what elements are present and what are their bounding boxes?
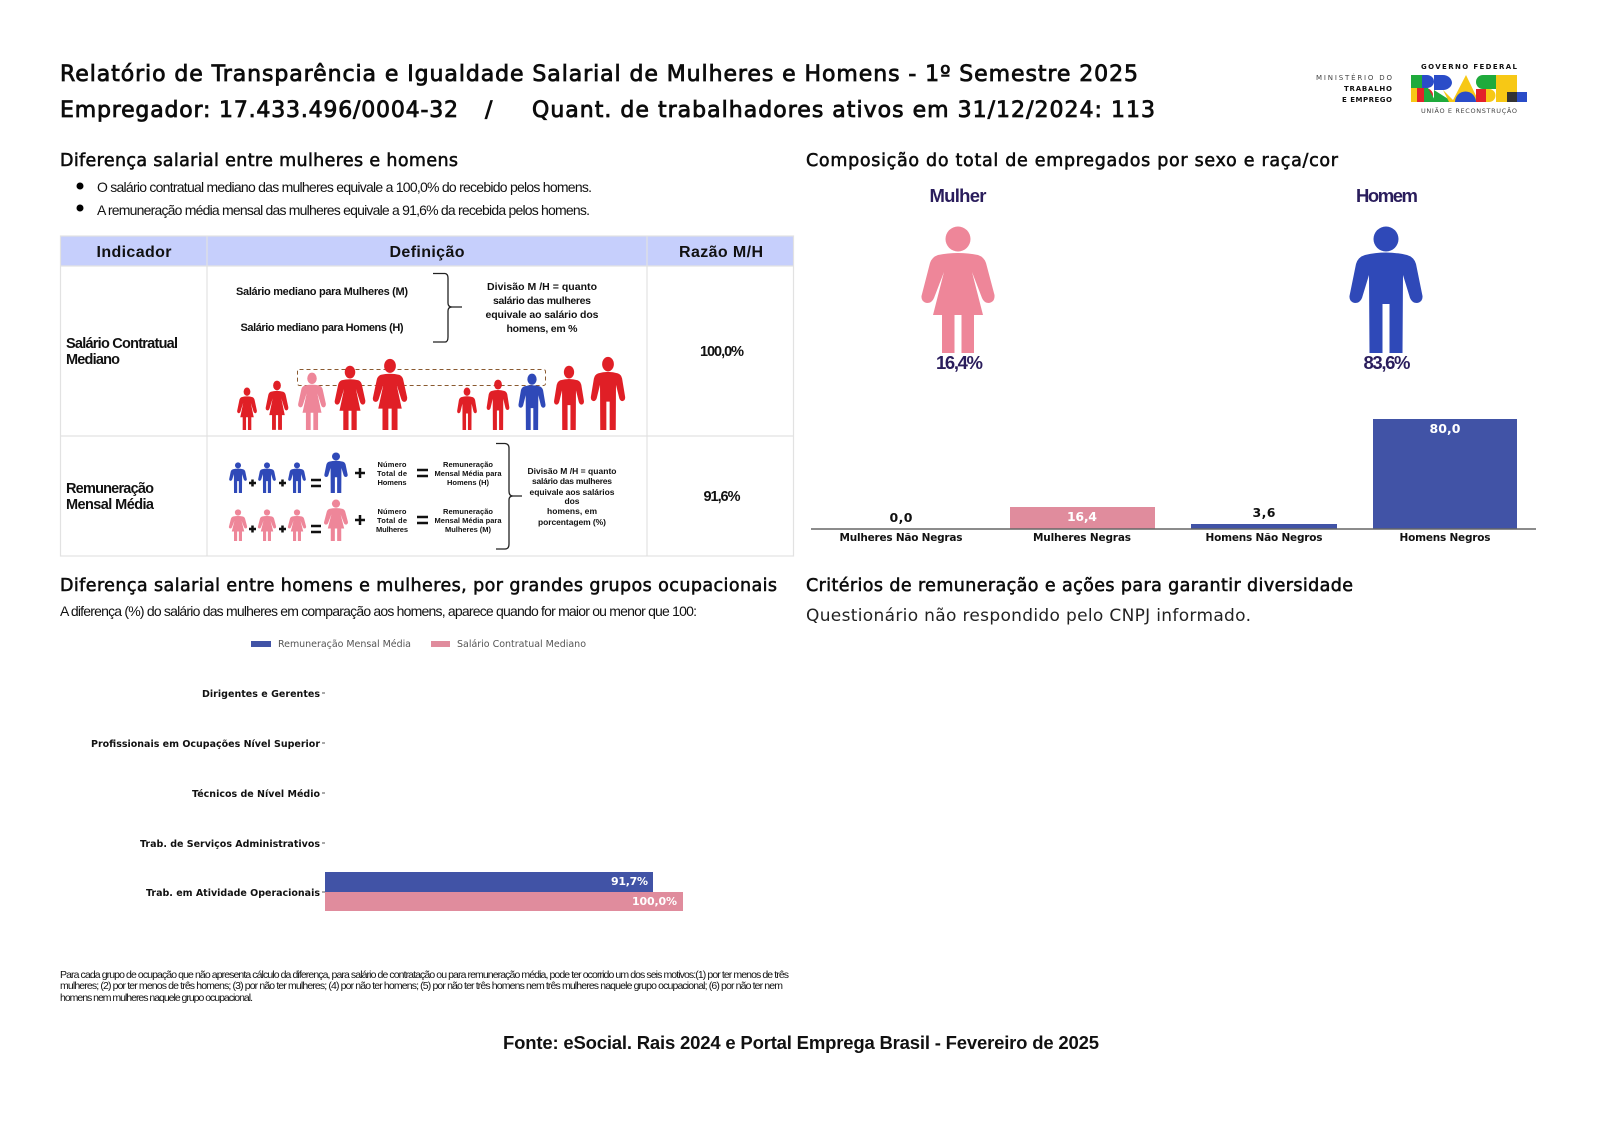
definition: median formula: Salário mediano para Homens (H) [240, 322, 404, 334]
bar chart: sex and race: 0,0 [890, 510, 913, 525]
bar chart: sex and race: 3,6 [1252, 505, 1276, 520]
logo: ministry and government: GOVERNO FEDERAL [1421, 63, 1518, 71]
definition: men average formula: Mensal Média para [434, 469, 502, 478]
definition: average division note: dos [564, 496, 580, 506]
figure: women share: 16,4% [936, 352, 983, 373]
title: / [485, 98, 493, 123]
figure: men share [1349, 185, 1423, 373]
horizontal bar chart: occupational groups: Profissionais em Ocupações Nível Superior [91, 739, 320, 750]
definition: men average formula: Número [378, 460, 407, 469]
logo: ministry and government: E EMPREGO [1342, 96, 1392, 104]
horizontal bar chart: occupational groups: Dirigentes e Gerentes [202, 689, 320, 700]
definition: men average formula: Total de [377, 469, 407, 478]
bar chart: sex and race: Mulheres Não Negras [840, 532, 962, 544]
heading: salary difference: Diferença salarial entre mulheres e homens [60, 151, 458, 171]
title: Empregador: 17.433.496/0004-32 [60, 98, 458, 123]
title: Quant. de trabalhadores ativos em 31/12/2024: 113 [532, 98, 1155, 123]
heading: criteria: Critérios de remuneração e ações para garantir diversidade [806, 576, 1353, 596]
bar chart: sex and race [811, 419, 1536, 544]
logo: ministry and government [1316, 63, 1527, 115]
definition: men average formula: Remuneração [443, 460, 493, 469]
definition: median formula: Salário mediano para Mulheres (M) [236, 286, 408, 298]
figure: men share: Homem [1356, 185, 1418, 206]
bar chart: sex and race: 80,0 [1430, 421, 1461, 436]
title: Relatório de Transparência e Igualdade Salarial de Mulheres e Homens - 1º Semestre 2025 [60, 62, 1138, 87]
text: questionnaire status: Questionário não respondido pelo CNPJ informado. [806, 606, 1251, 626]
definition: men average formula: Homens [378, 478, 406, 487]
chart legend [251, 639, 586, 650]
definition: average division note: salário das mulheres [532, 476, 612, 486]
people row: median illustration [237, 357, 625, 430]
table header [96, 244, 763, 261]
row label: remuneracao: Remuneração [66, 481, 154, 497]
title [60, 62, 1155, 123]
horizontal bar chart: occupational groups: Técnicos de Nível Médio [192, 789, 320, 800]
table header: Indicador [96, 244, 172, 261]
definition: women average formula: Mensal Média para [434, 516, 502, 525]
definition: median formula: equivale ao salário dos [486, 309, 599, 321]
footnote: homens nem mulheres naquele grupo ocupacional. [60, 992, 253, 1004]
logo: ministry and government: MINISTÉRIO DO [1316, 73, 1392, 82]
definition: women average formula: Remuneração [443, 507, 493, 516]
row label: salario contratual: Salário Contratual [66, 336, 178, 352]
definition: average division note [496, 444, 616, 549]
horizontal bar chart: occupational groups: Trab. em Atividade Operacionais [146, 888, 320, 899]
definition: women average formula: Mulheres (M) [445, 525, 492, 534]
bullet list [76, 179, 592, 218]
bullet list: A remuneração média mensal das mulheres equivale a 91,6% da recebida pelos homens. [97, 202, 590, 218]
definition: average division note: equivale aos salários [530, 487, 615, 497]
definition: median formula: Divisão M /H = quanto [487, 281, 597, 293]
table: indicators [60, 236, 794, 556]
logo: ministry and government: TRABALHO [1344, 85, 1392, 93]
bullet list: O salário contratual mediano das mulheres equivale a 100,0% do recebido pelos homens. [97, 179, 592, 195]
definition: men average formula: Homens (H) [447, 478, 490, 487]
horizontal bar chart: occupational groups: Trab. de Serviços Administrativos [140, 839, 320, 850]
logo: ministry and government: UNIÃO E RECONSTRUÇÃO [1421, 106, 1517, 115]
row label: salario contratual: Mediano [66, 352, 120, 368]
definition: average division note: porcentagem (%) [538, 517, 606, 527]
chart legend: Remuneração Mensal Média [278, 639, 411, 650]
definition: women average formula: Total de [377, 516, 407, 525]
horizontal bar chart: occupational groups: 91,7% [611, 875, 648, 888]
figure: women share: Mulher [930, 185, 986, 206]
row value: 91.6%: 91,6% [704, 489, 741, 505]
horizontal bar chart: occupational groups: 100,0% [632, 895, 677, 908]
table header: Definição [390, 244, 465, 261]
heading: workforce composition: Composição do total de empregados por sexo e raça/cor [806, 151, 1339, 171]
footnote: mulheres; (2) por ter menos de três homens; (3) por não ter mulheres; (4) por não ter homens; (5) por não ter três homens nem três mulheres naquele grupo ocupacional; (6) por não ter nem [60, 980, 783, 992]
definition: women average formula [229, 499, 502, 541]
footnote [60, 969, 789, 1004]
definition: average division note: Divisão M /H = quanto [528, 466, 616, 476]
bar chart: sex and race: 16,4 [1067, 509, 1097, 524]
bar chart: sex and race: Homens Não Negros [1206, 532, 1322, 544]
heading: occupational groups: Diferença salarial entre homens e mulheres, por grandes grupos ocupacionais [60, 576, 777, 596]
definition: women average formula: Número [378, 507, 407, 516]
figure: men share: 83,6% [1364, 352, 1410, 373]
definition: median formula [236, 274, 599, 342]
bar chart: sex and race: Mulheres Negras [1033, 532, 1131, 544]
subtitle: occupational chart: A diferença (%) do salário das mulheres em comparação aos homens, aparece quando for maior ou menor que 100: [60, 603, 697, 619]
horizontal bar chart: occupational groups [91, 689, 683, 911]
figure: women share [921, 185, 995, 373]
definition: men average formula [229, 452, 502, 493]
definition: median formula: salário das mulheres [493, 295, 591, 307]
definition: women average formula: Mulheres [376, 525, 408, 534]
definition: median formula: homens, em % [506, 323, 578, 335]
row value: 100%: 100,0% [700, 344, 744, 360]
row label: remuneracao [66, 481, 155, 513]
footnote: Para cada grupo de ocupação que não apresenta cálculo da diferença, para salário de contratação ou para remuneração média, pode ter ocorrido um dos seis motivos:(1) por ter menos de três [60, 969, 789, 981]
bar chart: sex and race: Homens Negros [1400, 532, 1490, 544]
row label: remuneracao: Mensal Média [66, 497, 155, 513]
chart legend: Salário Contratual Mediano [457, 639, 586, 650]
row label: salario contratual [66, 336, 178, 368]
definition: average division note: homens, em [547, 506, 597, 516]
source: Fonte: eSocial. Rais 2024 e Portal Emprega Brasil - Fevereiro de 2025 [503, 1032, 1099, 1053]
table header: Razão M/H [679, 244, 763, 261]
